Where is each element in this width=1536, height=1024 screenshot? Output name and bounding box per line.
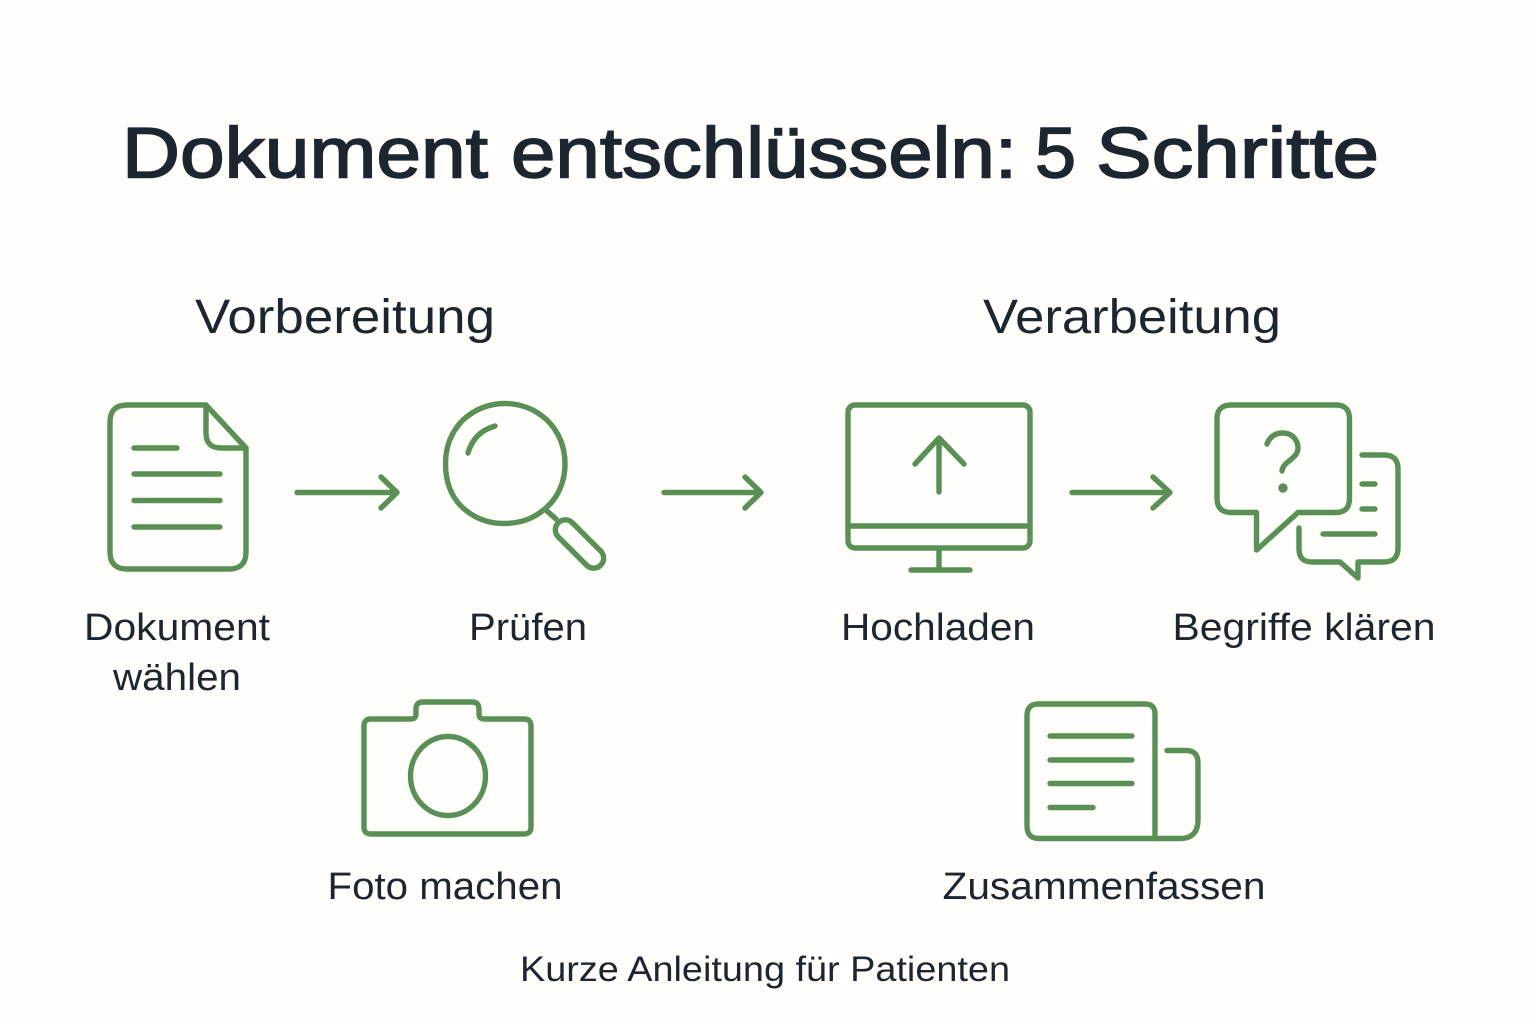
arrow 1 xyxy=(297,477,397,508)
icon: camera xyxy=(364,702,531,834)
icon: magnifying glass xyxy=(446,404,608,572)
label: Dokument wählen: Dokument xyxy=(84,607,270,649)
arrow 2 xyxy=(664,477,761,508)
icon: chat bubbles with question mark xyxy=(1217,405,1398,578)
title: entschlüsseln: xyxy=(511,114,1017,194)
title: Schritte xyxy=(1096,114,1379,194)
arrow 3 xyxy=(1072,477,1170,508)
label: Begriffe klären: Begriffe klären xyxy=(1172,607,1436,649)
label: Zusammenfassen: Zusammenfassen xyxy=(942,866,1266,908)
label: Hochladen: Hochladen xyxy=(841,607,1035,649)
heading: Verarbeitung: Verarbeitung xyxy=(983,291,1281,344)
label: Prüfen: Prüfen xyxy=(469,607,587,649)
icon: document xyxy=(110,405,246,569)
subtitle: Kurze Anleitung für Patienten xyxy=(520,950,1010,989)
icon: newspaper summary xyxy=(1027,704,1198,838)
title: 5 xyxy=(1035,114,1076,194)
heading: Vorbereitung: Vorbereitung xyxy=(195,291,495,344)
title: Dokument xyxy=(122,114,488,194)
text: wählen xyxy=(112,657,241,699)
label: Foto machen: Foto machen xyxy=(328,866,562,908)
icon: monitor with upload arrow xyxy=(848,405,1030,570)
